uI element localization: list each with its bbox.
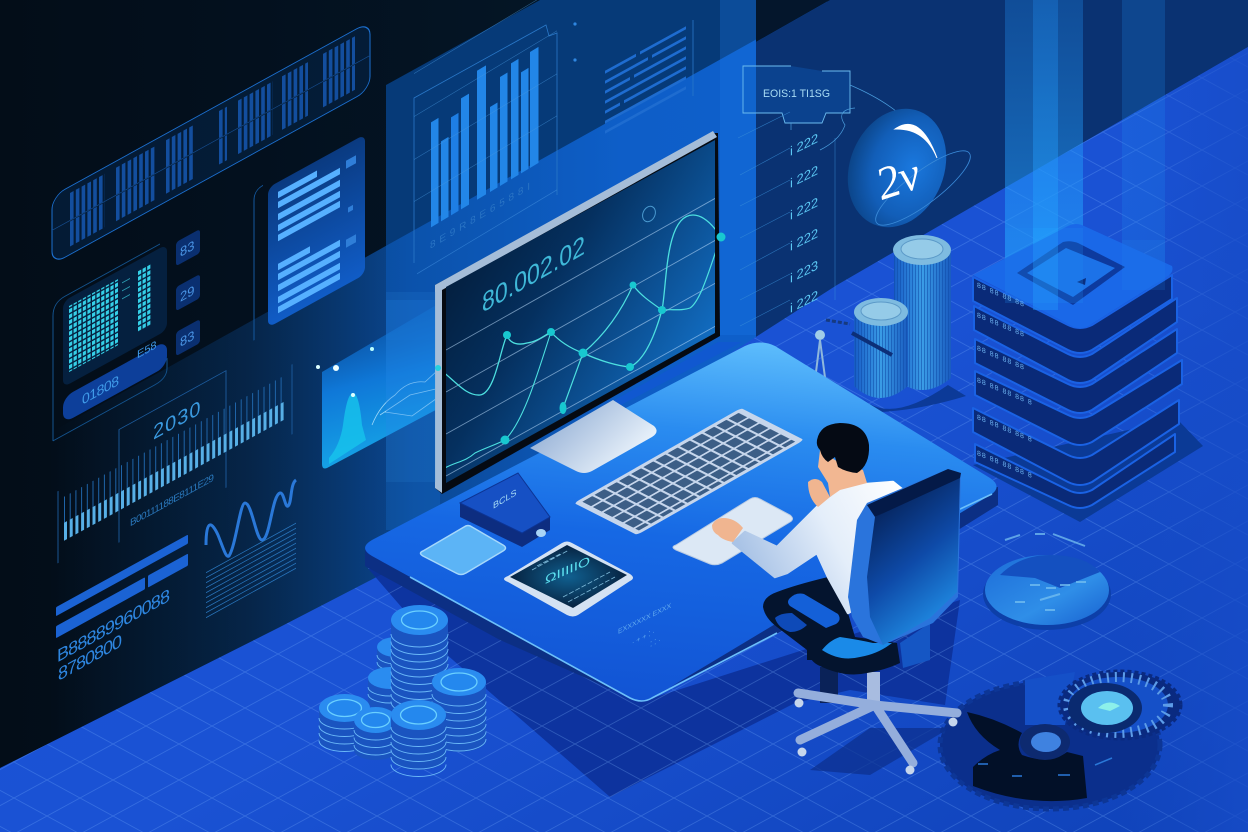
front translucent monitor light overlay: [386, 292, 436, 482]
light beams: [1005, 0, 1165, 300]
desk: [365, 342, 998, 702]
holographic orb badge: [831, 94, 979, 242]
legs and seat: [763, 577, 900, 674]
value list rows: [738, 112, 835, 326]
text lines block: [573, 20, 693, 132]
light tablet pad: [420, 526, 506, 574]
coin stack front: [391, 700, 446, 776]
coin stack left: [319, 694, 370, 752]
server port labels: 88 88 88 88 8: [977, 448, 1033, 480]
server port labels: 88 88 88 88: [977, 310, 1025, 339]
screen chart: [446, 198, 715, 476]
desk small caption: ⁚ ⁚ ·: [650, 635, 661, 649]
server top plate: [973, 224, 1172, 328]
panel: top data strip: [52, 21, 370, 264]
small value chips: [137, 229, 200, 378]
value list rows: i 222: [790, 131, 818, 159]
gear dial: [940, 672, 1180, 809]
panel: heatmap dashboard: [53, 240, 167, 441]
callout label box: EOIS:1 TI1SG: [763, 88, 830, 100]
floor shadow under desk: [365, 565, 960, 797]
coin stack large: [391, 605, 448, 714]
chair back: [848, 469, 961, 645]
sensor disk: [983, 534, 1111, 630]
small value chips: 29: [180, 282, 195, 305]
hands: [712, 518, 743, 542]
wave chart: [206, 480, 296, 618]
server port labels: 88 88 88 88: [977, 343, 1025, 372]
holographic orb badge: 2v: [869, 147, 927, 210]
bar strip chart with 2030 label: B00111188E8111E29: [130, 472, 214, 529]
small value chips: 83: [180, 237, 195, 260]
panel: text document card: [254, 129, 365, 340]
small value chips: 83: [180, 327, 195, 350]
chair base: [794, 667, 958, 774]
server port labels: 88 88 88 88: [977, 280, 1025, 309]
value list rows: i 222: [790, 288, 818, 316]
blue bars with digit text: B88889960088: [57, 586, 170, 667]
bar strip chart with 2030 label: 2030: [153, 395, 201, 445]
storage cylinders: [815, 235, 966, 412]
chart panel: upper bars: [414, 0, 557, 276]
keyboard: [574, 408, 804, 535]
server port labels: [977, 280, 1033, 480]
tablet: [504, 542, 633, 616]
callout label box: [743, 66, 904, 150]
value list rows: i 223: [790, 257, 818, 286]
screen readout: 80.002.02: [482, 230, 585, 319]
coin stacks: [319, 605, 486, 776]
small lamp prop: [815, 320, 850, 385]
monitor stand: [530, 342, 742, 473]
tablet: ΩIIIIIO: [545, 554, 590, 587]
value list rows: i 222: [790, 163, 818, 191]
person at desk: [712, 423, 961, 775]
bar axis labels: 8E9R8E6588I: [430, 181, 530, 252]
server layers: [973, 275, 1182, 508]
desk small caption: · + + ⁚ ·: [632, 627, 655, 647]
value list rows: i 222: [790, 195, 818, 223]
pill readout number: 01808: [82, 372, 119, 409]
blue bars with digit text: [56, 535, 188, 687]
server port labels: 88 88 88 88 8: [977, 412, 1033, 444]
monitor: [435, 131, 730, 494]
coin stack mid: [354, 707, 397, 760]
dark device box: BCLS: [493, 487, 517, 512]
value list rows: i 222: [790, 226, 818, 254]
server stack: [973, 224, 1203, 522]
chair post: [900, 623, 930, 668]
desk small caption: EXXXXXX EXXX: [618, 601, 671, 636]
coin stack small rear: [368, 637, 415, 711]
coin stack right: [432, 668, 486, 752]
small value chips: E58: [137, 337, 157, 361]
blue bars with digit text: 8780800: [58, 631, 122, 686]
trackpad: [673, 498, 792, 565]
server port labels: 88 88 88 88 8: [977, 375, 1033, 407]
dark device box: [460, 473, 550, 547]
chair base shadow: [810, 728, 950, 775]
bar strip chart with 2030 label: [58, 334, 292, 580]
torso and arm shirt: [733, 482, 903, 613]
head: [817, 423, 869, 497]
cyan glowing chart card: [316, 300, 445, 530]
